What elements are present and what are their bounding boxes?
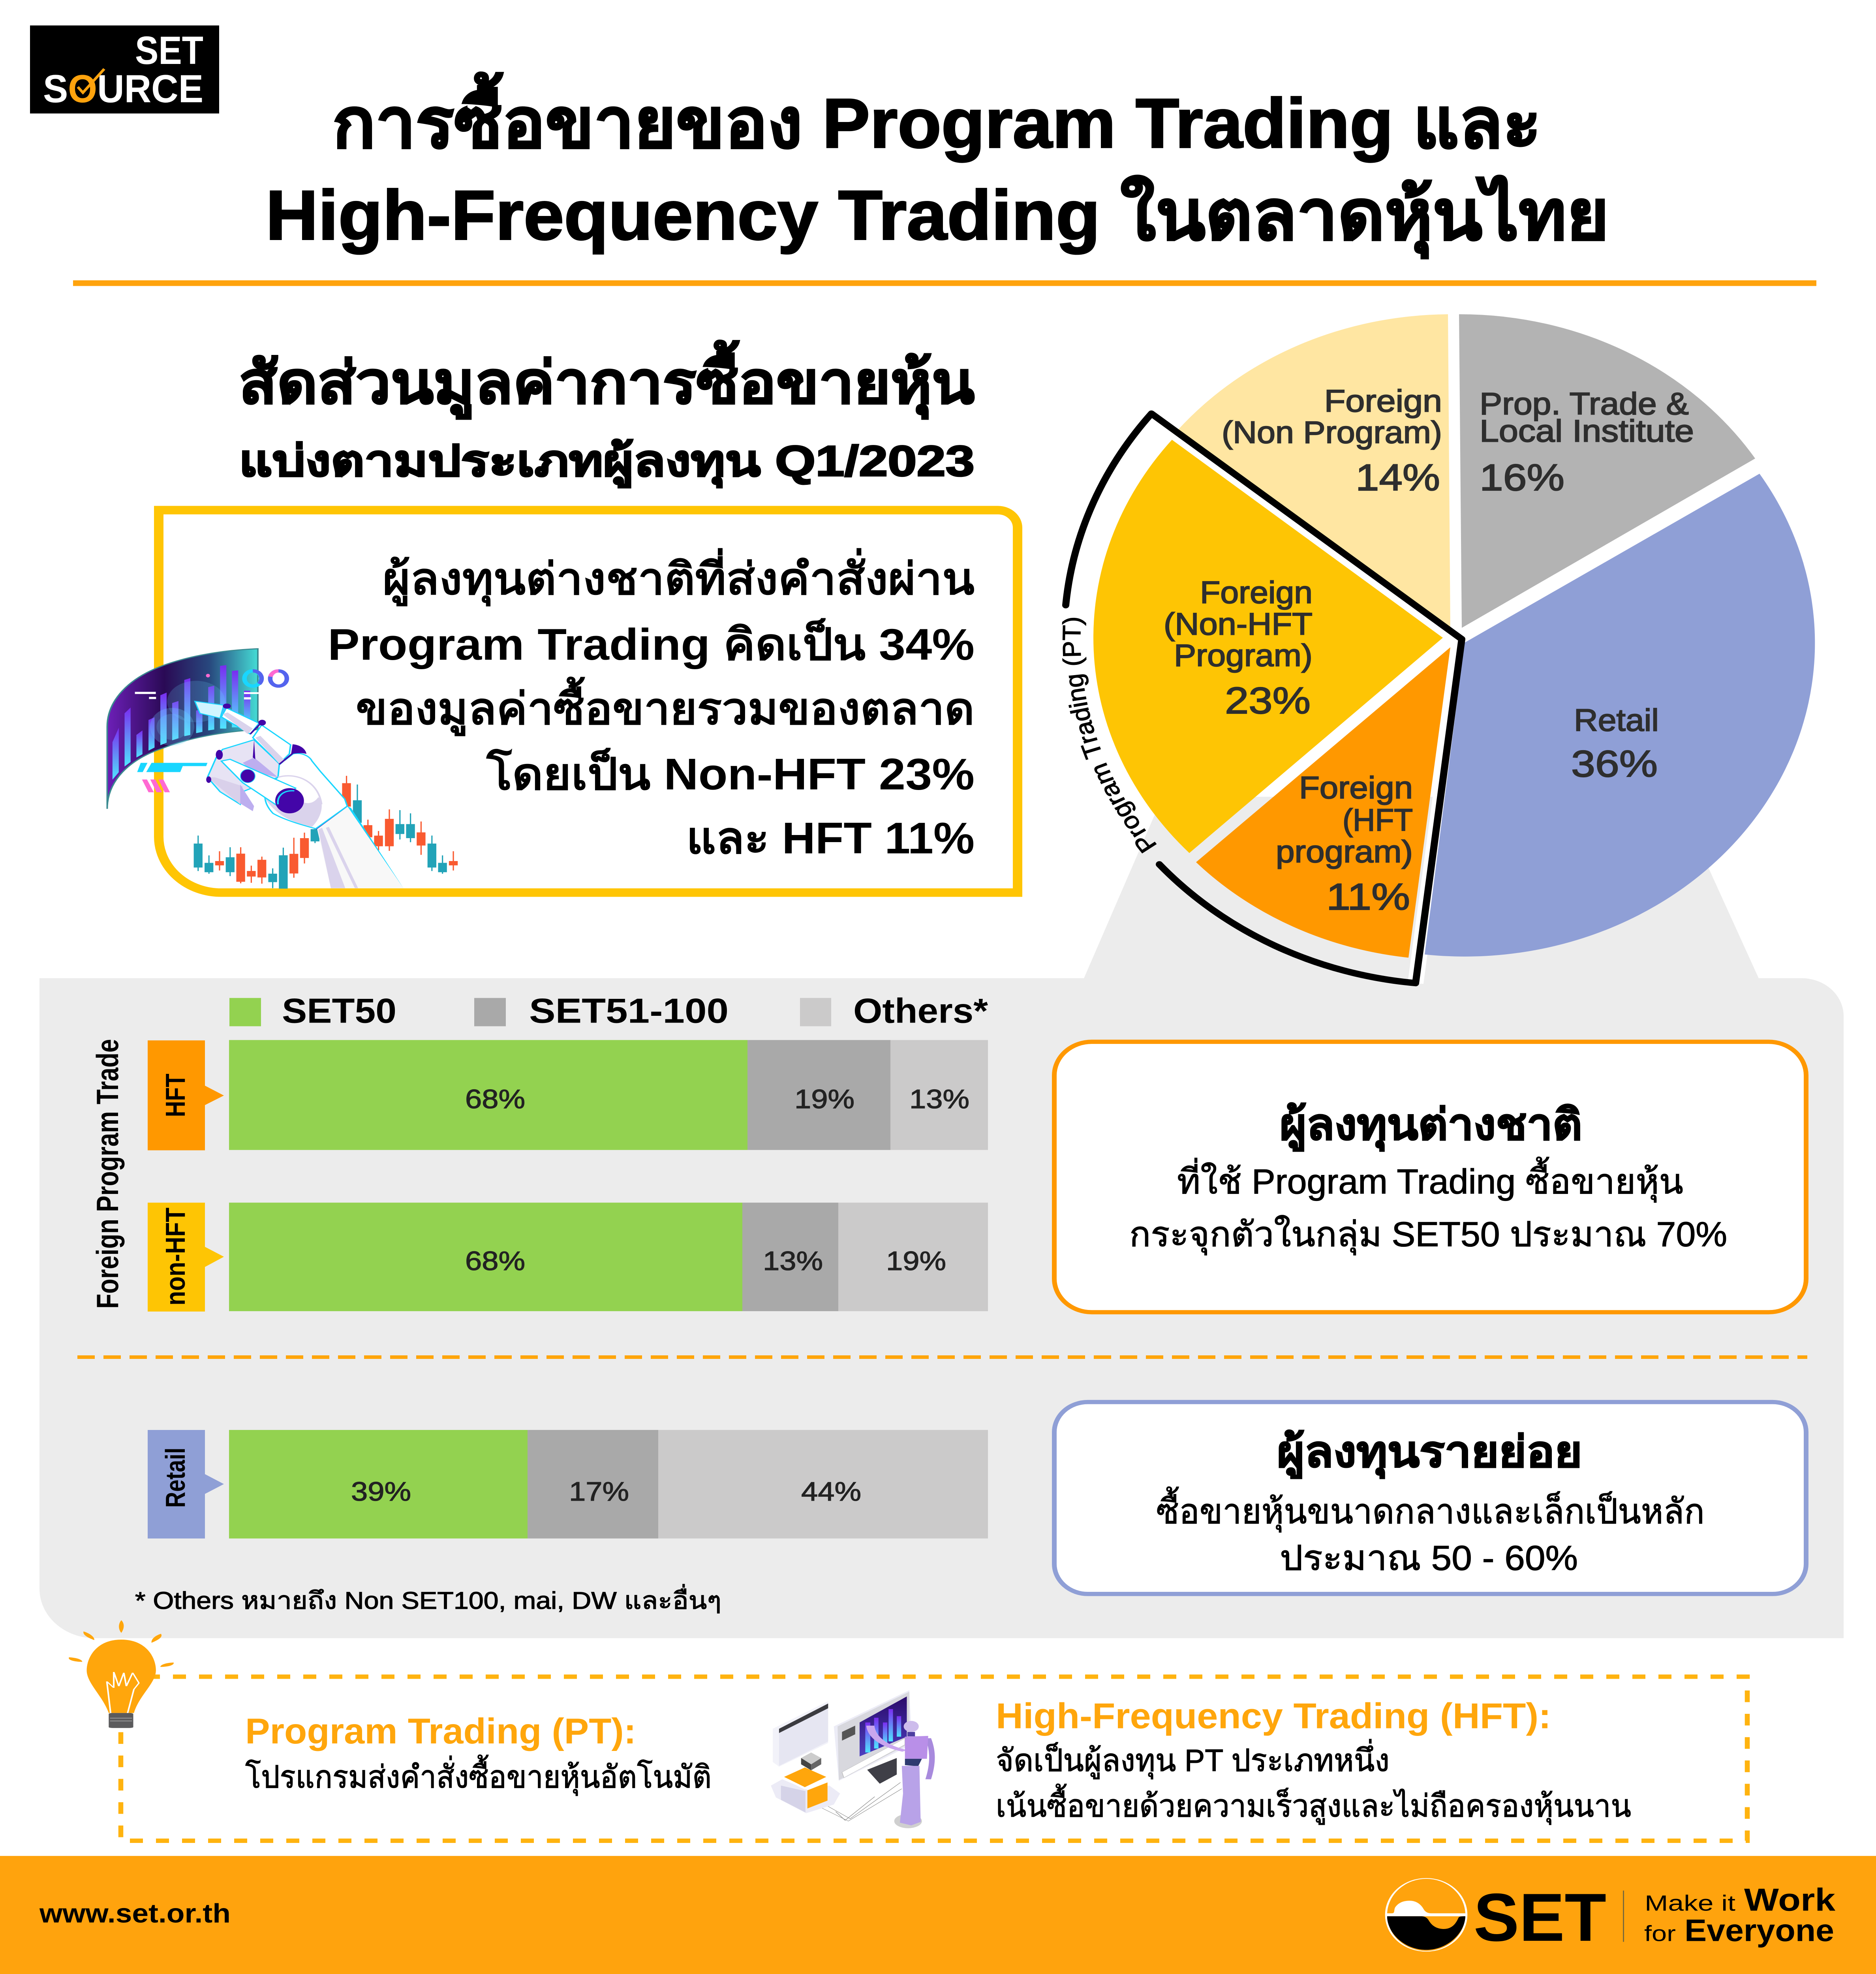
bar: foreign non-HFT (148, 1203, 988, 1312)
definition: high-frequency trading (996, 1696, 1631, 1825)
pie labels: 14% (1356, 457, 1440, 499)
callout text: โดยเป็น Non-HFT 23% (486, 747, 975, 799)
pie labels: Foreign (1200, 575, 1313, 610)
callout text (328, 548, 975, 863)
slogan: for (1644, 1922, 1676, 1946)
icon: light bulb (69, 1620, 174, 1730)
pie labels: 11% (1326, 876, 1410, 918)
bar: foreign HFT: 13% (909, 1085, 969, 1114)
callout: retail investors (1054, 1402, 1806, 1594)
footer band (0, 1856, 1876, 1974)
slice: foreign HFT program 11% (1196, 647, 1450, 958)
bar: retail: 44% (801, 1477, 861, 1507)
definition: program trading: Program Trading (PT): (245, 1711, 636, 1751)
bar: foreign non-HFT: non-HFT (160, 1208, 191, 1306)
axis label: foreign program trade: Foreign Program Trade (90, 1039, 125, 1309)
slice: retail 36% (1425, 474, 1815, 957)
section heading: value share: แบ่งตามประเภทผู้ลงทุน Q1/2023 (239, 437, 975, 488)
bar: retail: 17% (569, 1477, 629, 1507)
logo: SET emblem (1386, 1878, 1467, 1951)
pie labels: Foreign (1299, 770, 1413, 805)
pie labels: Prop. Trade & (1480, 386, 1689, 421)
logo: SET Source: SOURCE (43, 67, 203, 111)
pie labels: 23% (1225, 680, 1311, 722)
logo: SET Source (30, 25, 219, 113)
icon: robot hand with chart screen and candlesticks (107, 649, 457, 888)
callout: foreign investors: ผู้ลงทุนต่างชาติ (1280, 1100, 1582, 1151)
pie labels: (Non-HFT (1164, 606, 1313, 641)
callout: retail investors: ซื้อขายหุ้นขนาดกลางและเล็กเป็นหลัก (1156, 1486, 1705, 1533)
title: High-Frequency Trading ในตลาดหุ้นไทย (266, 175, 1609, 259)
title (266, 72, 1609, 259)
definition: program trading (245, 1711, 712, 1796)
bracket: program trading outline (1066, 414, 1462, 983)
slogan (1644, 1882, 1836, 1948)
callout text: และ HFT 11% (686, 814, 975, 863)
definition: high-frequency trading: จัดเป็นผู้ลงทุน PT ประเภทหนึ่ง (996, 1739, 1390, 1779)
footnote: * Others หมายถึง Non SET100, mai, DW และอื่นๆ (135, 1584, 721, 1614)
slice: foreign non program 14% (1178, 314, 1450, 630)
pie labels: Retail (1574, 702, 1659, 737)
callout: foreign investors: ที่ใช้ Program Trading ซื้อขายหุ้น (1177, 1157, 1683, 1203)
callout: foreign investors: กระจุกตัวในกลุ่ม SET50 ประมาณ 70% (1129, 1215, 1727, 1255)
pie labels: 16% (1480, 457, 1564, 499)
icon: robot figure at trading screen (771, 1690, 932, 1828)
bar: retail: Retail (160, 1448, 191, 1508)
logo: SET Source: SET (135, 28, 203, 73)
callout: foreign investors (1054, 1042, 1806, 1312)
title: การซื้อขายของ Program Trading และ (332, 72, 1541, 162)
section heading: value share (239, 340, 975, 488)
definition: high-frequency trading: เน้นซื้อขายด้วยความเร็วสูงและไม่ถือครองหุ้นนาน (996, 1784, 1631, 1825)
bar: foreign HFT: 19% (794, 1085, 854, 1114)
bar: foreign HFT: HFT (160, 1073, 191, 1117)
label: program trading curved: Program Trading (PT) (1057, 616, 1162, 858)
pie labels: program) (1276, 834, 1413, 869)
pie labels (1164, 383, 1694, 918)
slogan: Make it (1645, 1891, 1735, 1916)
callout text: Program Trading คิดเป็น 34% (328, 617, 975, 669)
section heading: value share: สัดส่วนมูลค่าการซื้อขายหุ้น (239, 340, 975, 419)
legend (229, 991, 988, 1030)
bar: retail: 39% (351, 1477, 411, 1507)
pie labels: (Non Program) (1222, 415, 1442, 450)
legend: SET51-100 (529, 991, 729, 1030)
callout text: ของมูลค่าซื้อขายรวมของตลาด (356, 676, 975, 736)
callout text: ผู้ลงทุนต่างชาติที่ส่งคำสั่งผ่าน (383, 548, 975, 606)
slice: foreign non-HFT program 23% (1093, 440, 1443, 853)
legend: Others* (853, 991, 988, 1030)
slice: prop trade and local institute 16% (1459, 314, 1755, 628)
panel: definitions dashed frame (121, 1677, 1747, 1841)
pie labels: Program) (1174, 638, 1313, 673)
legend: SET50 (282, 991, 396, 1030)
bar: foreign HFT (148, 1040, 988, 1150)
definition: high-frequency trading: High-Frequency Trading (HFT): (996, 1696, 1551, 1736)
pie labels: (HFT (1343, 803, 1413, 837)
slogan: Everyone (1684, 1913, 1834, 1948)
footer url: www.set.or.th (39, 1899, 231, 1928)
callout: retail investors: ผู้ลงทุนรายย่อย (1277, 1428, 1582, 1479)
bar: foreign HFT: 68% (465, 1085, 525, 1114)
callout: retail investors: ประมาณ 50 - 60% (1280, 1539, 1578, 1577)
logo: SET wordmark: SET (1474, 1879, 1606, 1955)
chart panel background (39, 797, 1844, 1638)
pie labels: 36% (1571, 743, 1658, 785)
pie labels: Local Institute (1480, 413, 1694, 448)
bar: foreign non-HFT: 13% (763, 1246, 823, 1276)
definition: program trading: โปรแกรมส่งคำสั่งซื้อขายหุ้นอัตโนมัติ (245, 1754, 712, 1796)
bar: foreign non-HFT: 19% (886, 1246, 946, 1276)
pie chart: investor type share (1057, 314, 1815, 983)
pie labels: Foreign (1324, 383, 1442, 418)
bar: retail (148, 1430, 988, 1539)
bar: foreign non-HFT: 68% (465, 1246, 525, 1276)
slogan: Work (1744, 1882, 1836, 1918)
panel: foreign program trading callout (159, 510, 1018, 893)
